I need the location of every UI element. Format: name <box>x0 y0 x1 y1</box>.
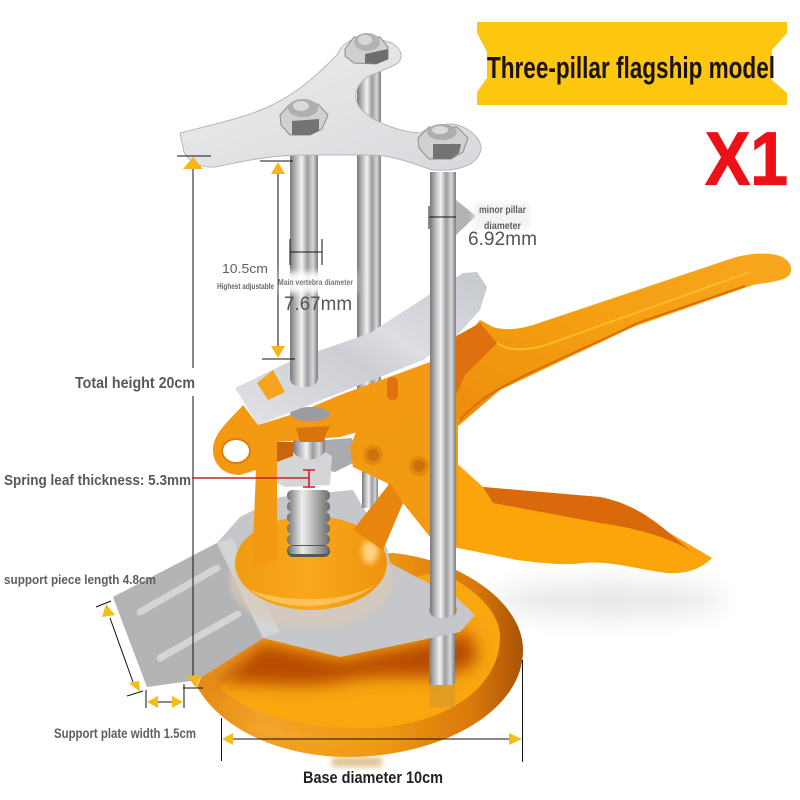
label: Spring leaf thickness: 5.3mm <box>4 472 191 489</box>
silver lever plate <box>235 272 487 425</box>
label: Support plate width 1.5cm <box>54 725 196 741</box>
dimension: base diameter 10cm <box>222 660 522 787</box>
dimension: adjustable height 10.5cm <box>217 161 295 359</box>
three-armed top plate <box>180 36 481 170</box>
label caption: minor pillar <box>479 204 526 216</box>
dimension: main pillar diameter 7.67mm <box>278 239 356 315</box>
orange latch tab on lever <box>257 370 285 400</box>
silver support plate <box>113 490 475 687</box>
front pillar section below plate <box>429 625 455 707</box>
round orange base <box>197 553 523 757</box>
label value: 6.92mm <box>468 229 537 250</box>
dimension: support plate width 1.5cm <box>54 684 196 741</box>
white halo behind label <box>474 203 530 229</box>
icon: pivot rivet two <box>409 456 429 476</box>
lower orange handle <box>430 452 712 573</box>
orange cup <box>229 516 393 628</box>
main pillar <box>290 155 318 387</box>
hex bolt: rear <box>345 33 388 64</box>
compression spring <box>287 490 330 557</box>
banner: model title <box>477 22 787 105</box>
label: Base diameter 10cm <box>303 768 443 787</box>
label caption: Highest adjustable <box>217 281 274 291</box>
front minor pillar <box>430 172 456 618</box>
label value: 10.5cm <box>222 261 268 276</box>
dimension: total height 20cm <box>75 156 211 688</box>
orange strut <box>353 483 403 550</box>
small orange latch behind pillar <box>387 377 398 400</box>
grey pointer arrow <box>456 200 476 235</box>
ground shadow under handle <box>495 582 725 618</box>
label: support piece length 4.8cm <box>4 572 156 587</box>
soft reflection below base <box>332 757 382 767</box>
label caption: Main vertebra diameter <box>278 277 354 287</box>
icon: pivot rivet one <box>363 445 383 465</box>
hex bolt: left <box>280 99 328 135</box>
icon: hanging ring hole <box>222 439 250 463</box>
label: Total height 20cm <box>75 375 195 392</box>
washer under lever <box>290 407 330 421</box>
spring leaf and shaft <box>275 438 355 487</box>
orange side body with pivots <box>350 410 458 545</box>
white halo behind label <box>186 368 198 396</box>
rear pillar <box>357 70 381 508</box>
hex bolt: front <box>418 124 468 159</box>
dimension: minor pillar diameter 6.92mm <box>429 200 537 250</box>
product illustration: tile leveling lifter <box>113 33 791 767</box>
white halo behind label <box>280 272 356 293</box>
dimension: support piece length 4.8cm <box>4 572 156 696</box>
orange frame with ring <box>213 362 445 568</box>
label caption continued: diameter <box>484 220 521 232</box>
quantity marker X1: X1 <box>705 116 788 200</box>
label value: 7.67mm <box>284 294 352 315</box>
upper orange handle <box>430 254 791 427</box>
dimension: spring leaf thickness 5.3mm <box>4 470 315 489</box>
